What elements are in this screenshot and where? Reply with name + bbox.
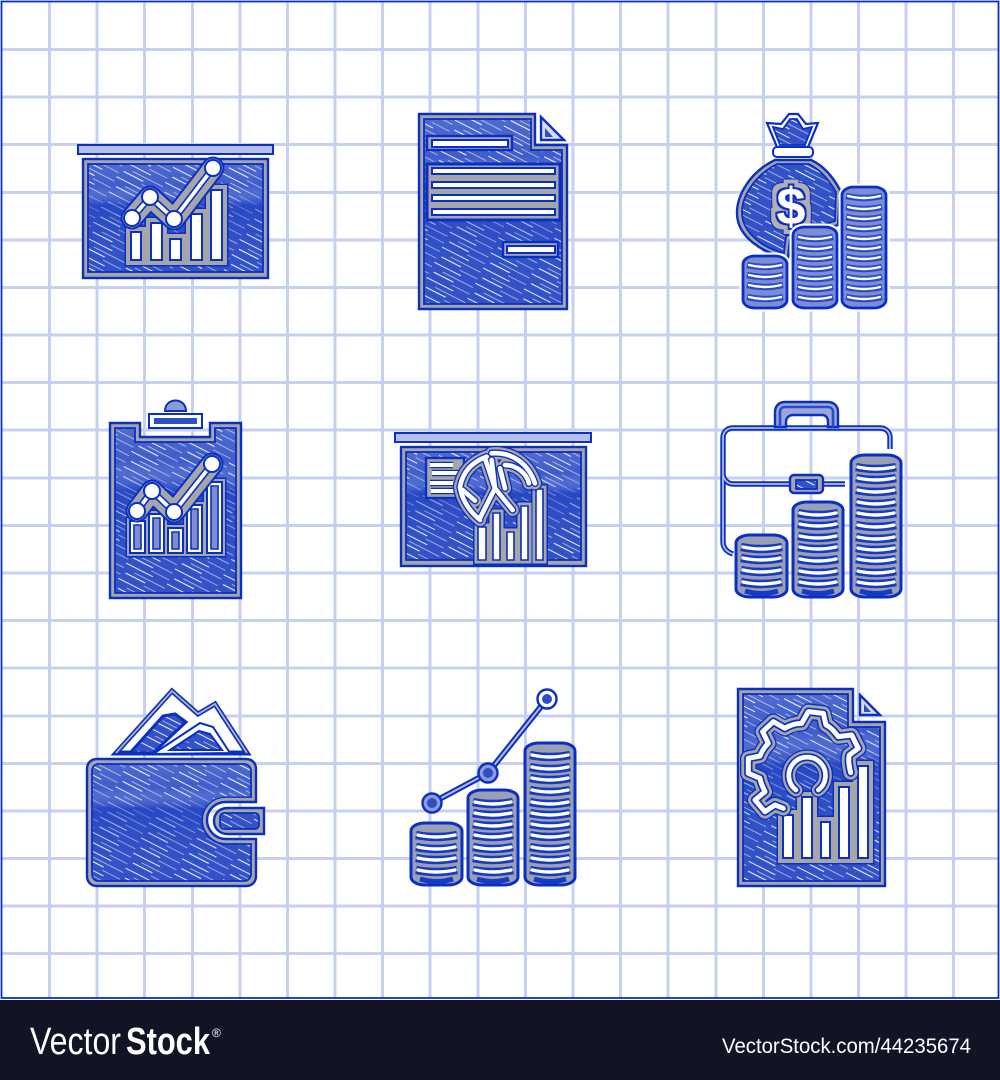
dollar sign: $ xyxy=(777,178,806,236)
medium coin stack xyxy=(793,227,837,308)
wallet clasp xyxy=(214,808,264,834)
small coin stack xyxy=(411,823,462,885)
tall coin stack xyxy=(851,455,901,597)
money bag xyxy=(737,114,840,258)
wallet body xyxy=(87,759,256,886)
growth line xyxy=(422,690,556,812)
gear xyxy=(748,712,858,812)
small coin stack xyxy=(743,256,787,308)
medium coin stack xyxy=(468,790,518,885)
icon: money bag with coin stacks xyxy=(737,114,886,308)
medium coin stack xyxy=(793,502,843,597)
icon: text document xyxy=(419,114,567,309)
icon: presentation board with line chart xyxy=(78,145,273,278)
image id: VectorStock.com/44235674 xyxy=(722,1035,971,1058)
icon: presentation board with pie chart xyxy=(395,433,591,566)
tall coin stack xyxy=(525,743,575,885)
icon: clipboard with chart xyxy=(110,400,241,598)
icon: briefcase with coin stacks xyxy=(723,402,901,597)
registered mark: ® xyxy=(212,1026,221,1040)
icon: coin stacks with growth line xyxy=(411,690,575,885)
briefcase outline xyxy=(723,402,890,554)
logo wordmark: Vector xyxy=(30,1021,121,1063)
small coin stack xyxy=(736,535,787,597)
icon: document with gear and bars xyxy=(738,689,885,886)
logo wordmark bold: Stock xyxy=(126,1021,211,1063)
footer bar xyxy=(0,1000,1000,1080)
tall coin stack xyxy=(842,187,886,308)
icon: wallet with banknotes xyxy=(87,691,264,886)
banknotes xyxy=(116,691,247,754)
